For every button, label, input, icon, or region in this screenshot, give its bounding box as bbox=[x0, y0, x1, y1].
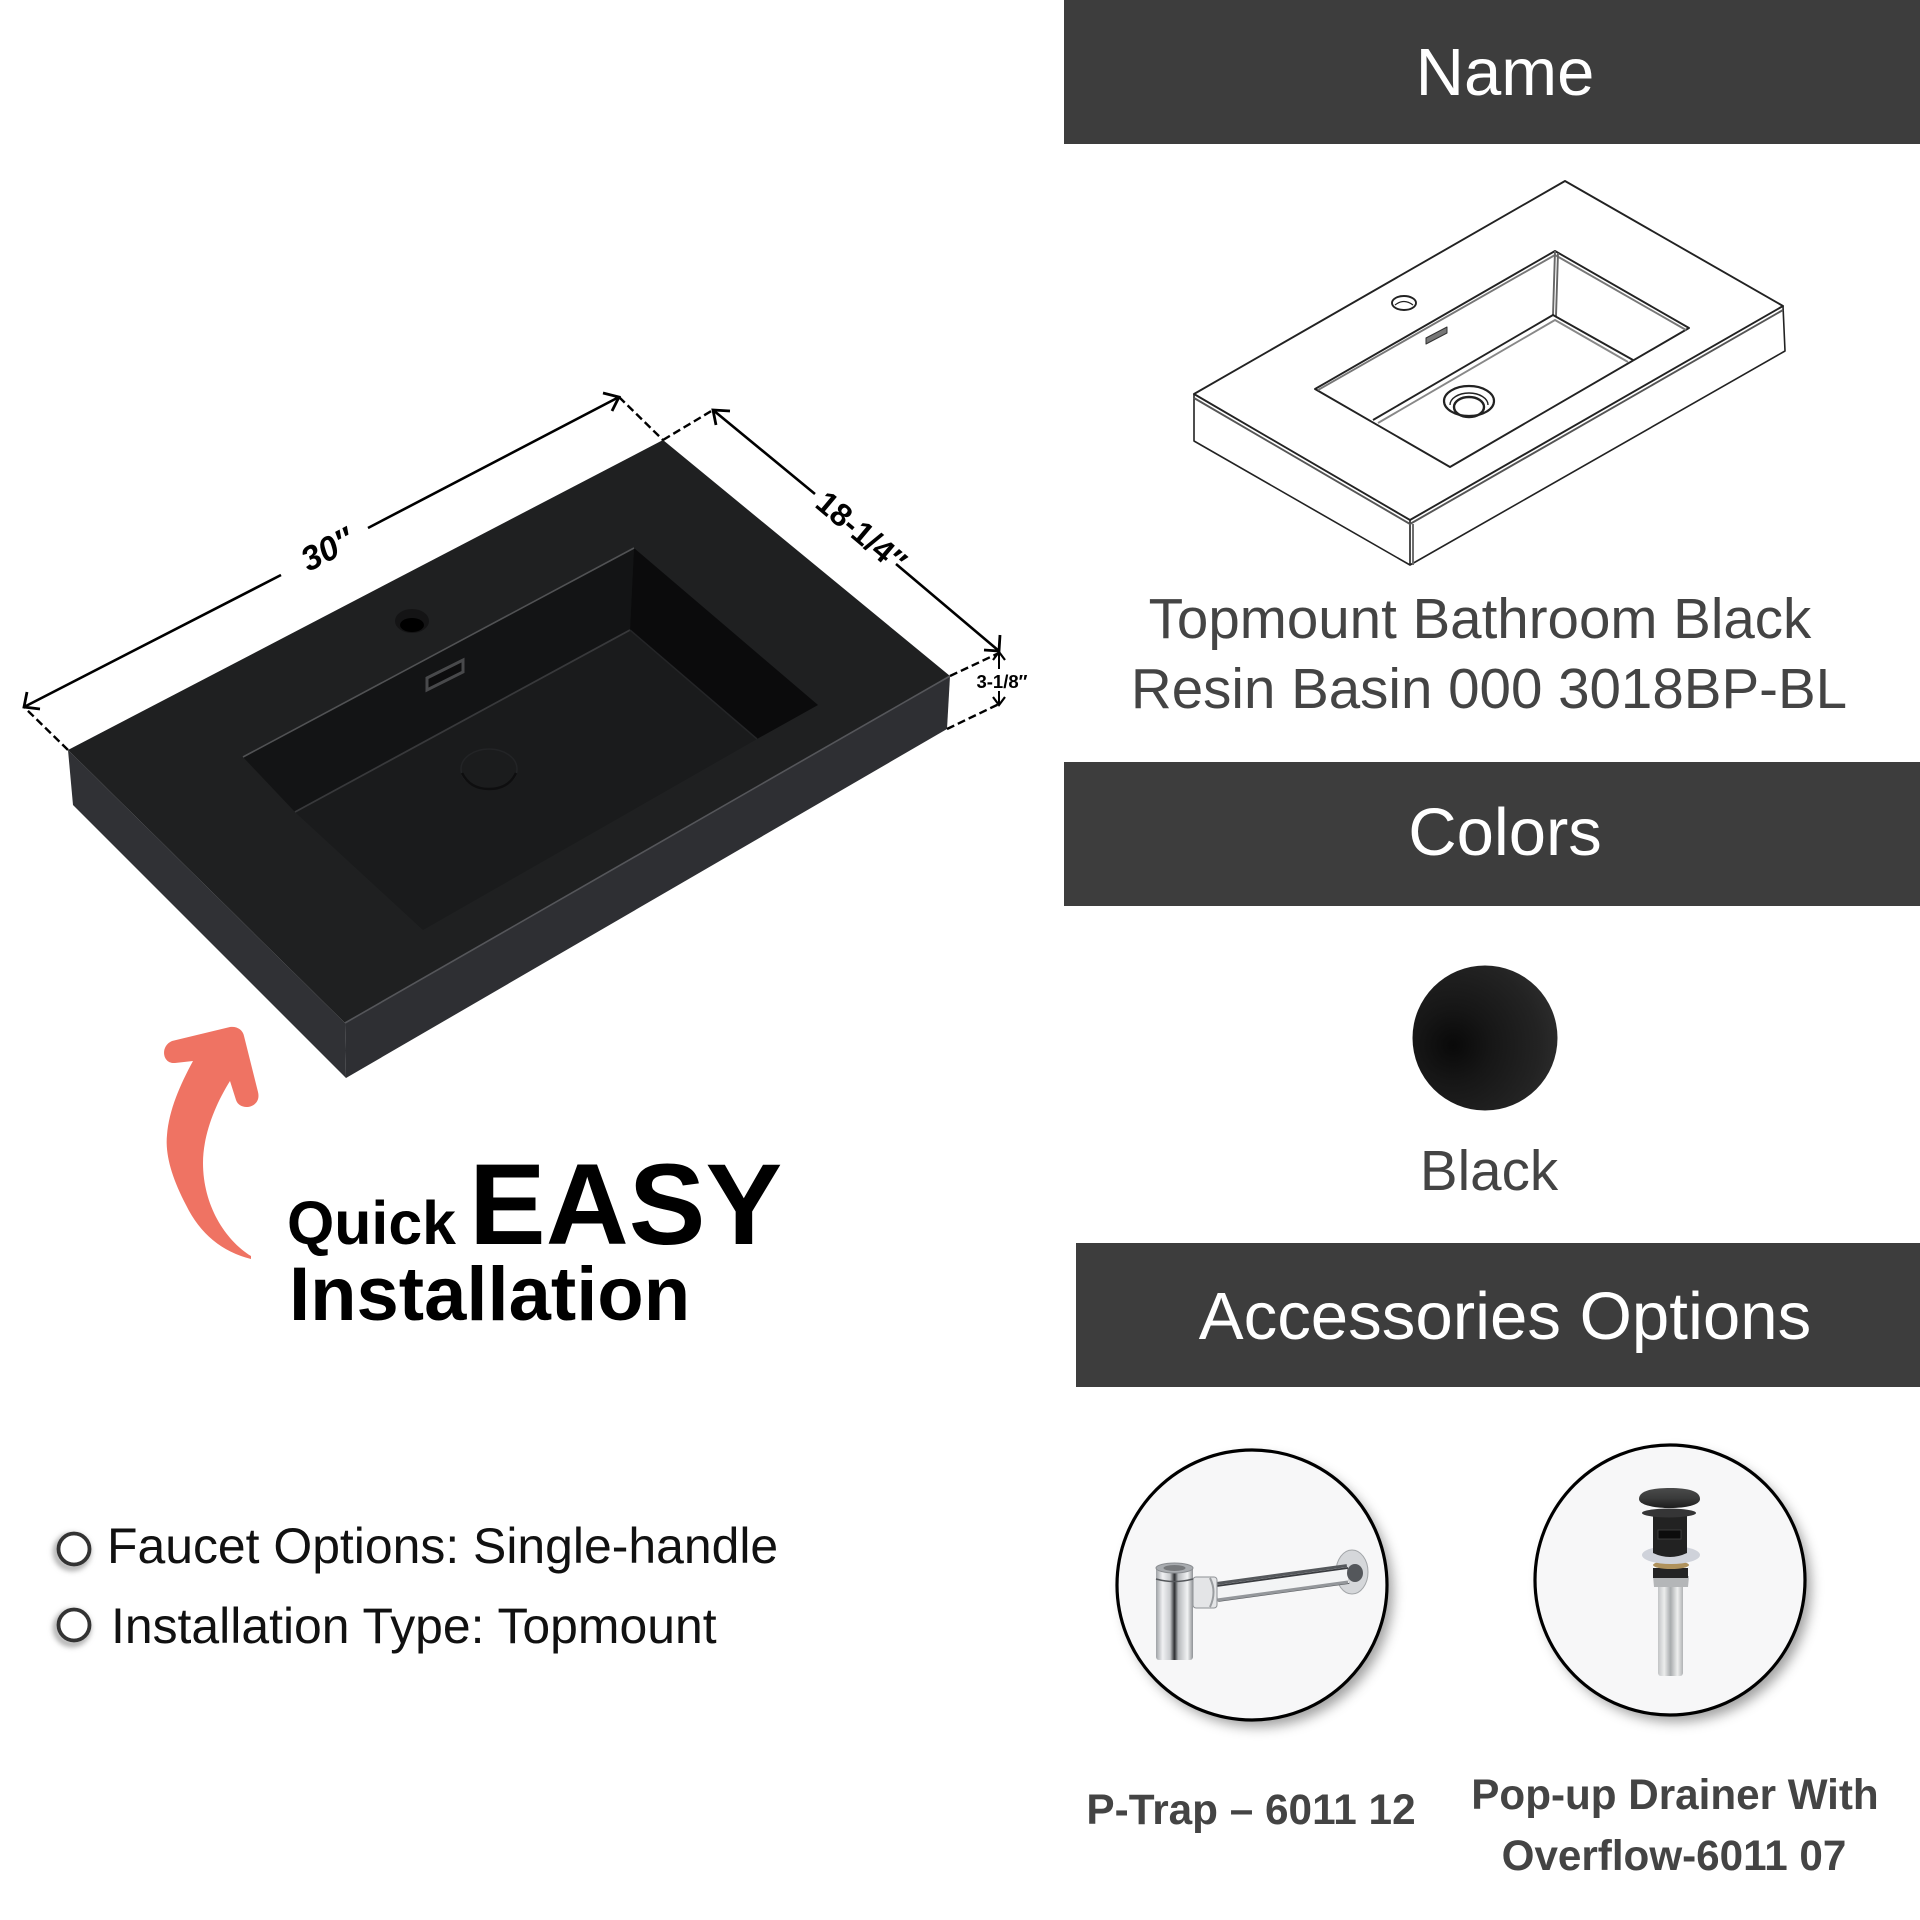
accessory: P-Trap: P-Trap – 6011 12 bbox=[1086, 1786, 1416, 1833]
caption: drainer: Pop-up Drainer With bbox=[1471, 1771, 1879, 1818]
headline: Quick EASY Installation: Installation bbox=[289, 1252, 690, 1337]
header: Accessories Options bbox=[1076, 1243, 1920, 1387]
caption: drainer bbox=[1471, 1771, 1879, 1879]
dimension: 18-1/4 inch depth bbox=[663, 410, 1000, 651]
headline: Quick EASY Installation: EASY bbox=[469, 1141, 782, 1269]
dimension: 30 inch width bbox=[24, 393, 663, 750]
icon: pop-up drain bbox=[1639, 1488, 1700, 1676]
accessory: Pop-up Drainer bbox=[1471, 1445, 1879, 1879]
headline: Quick EASY Installation bbox=[287, 1141, 782, 1337]
bullet: installation type: Installation Type: Topmount bbox=[111, 1598, 717, 1654]
panel: black basin product render with dimensions bbox=[24, 393, 1028, 1078]
basin body bbox=[68, 440, 950, 1078]
icon: coral curved arrow bbox=[164, 1027, 258, 1259]
caption: drainer: Overflow-6011 07 bbox=[1502, 1832, 1846, 1879]
feature list bbox=[56, 1518, 778, 1654]
product name text: Resin Basin 000 3018BP-BL bbox=[1131, 657, 1847, 720]
header: Colors bbox=[1064, 762, 1920, 906]
header: Name bbox=[1064, 0, 1920, 144]
icon: chrome P-trap pipe bbox=[1156, 1550, 1368, 1660]
dimension: 3-1/8 inch height bbox=[947, 652, 1028, 729]
colour swatch: black bbox=[1412, 966, 1559, 1202]
header: Accessories Options: Accessories Options bbox=[1199, 1279, 1811, 1354]
colour swatch: black: Black bbox=[1420, 1139, 1559, 1202]
header: Name: Name bbox=[1416, 35, 1594, 110]
dimension: 3-1/8 inch height: 3-1/8″ bbox=[976, 671, 1028, 692]
dimension: 30 inch width: 30″ bbox=[295, 520, 362, 579]
line drawing of basin bbox=[1194, 181, 1785, 565]
dimension: 18-1/4 inch depth: 18-1/4″ bbox=[809, 484, 914, 580]
product name text bbox=[1131, 587, 1847, 720]
header: Colors: Colors bbox=[1408, 795, 1602, 870]
accessory: P-Trap bbox=[1086, 1450, 1416, 1833]
bullet: faucet options: Faucet Options: Single-handle bbox=[107, 1518, 778, 1574]
headline: Quick EASY Installation: Quick bbox=[287, 1189, 456, 1257]
product name text: Topmount Bathroom Black bbox=[1149, 587, 1812, 650]
